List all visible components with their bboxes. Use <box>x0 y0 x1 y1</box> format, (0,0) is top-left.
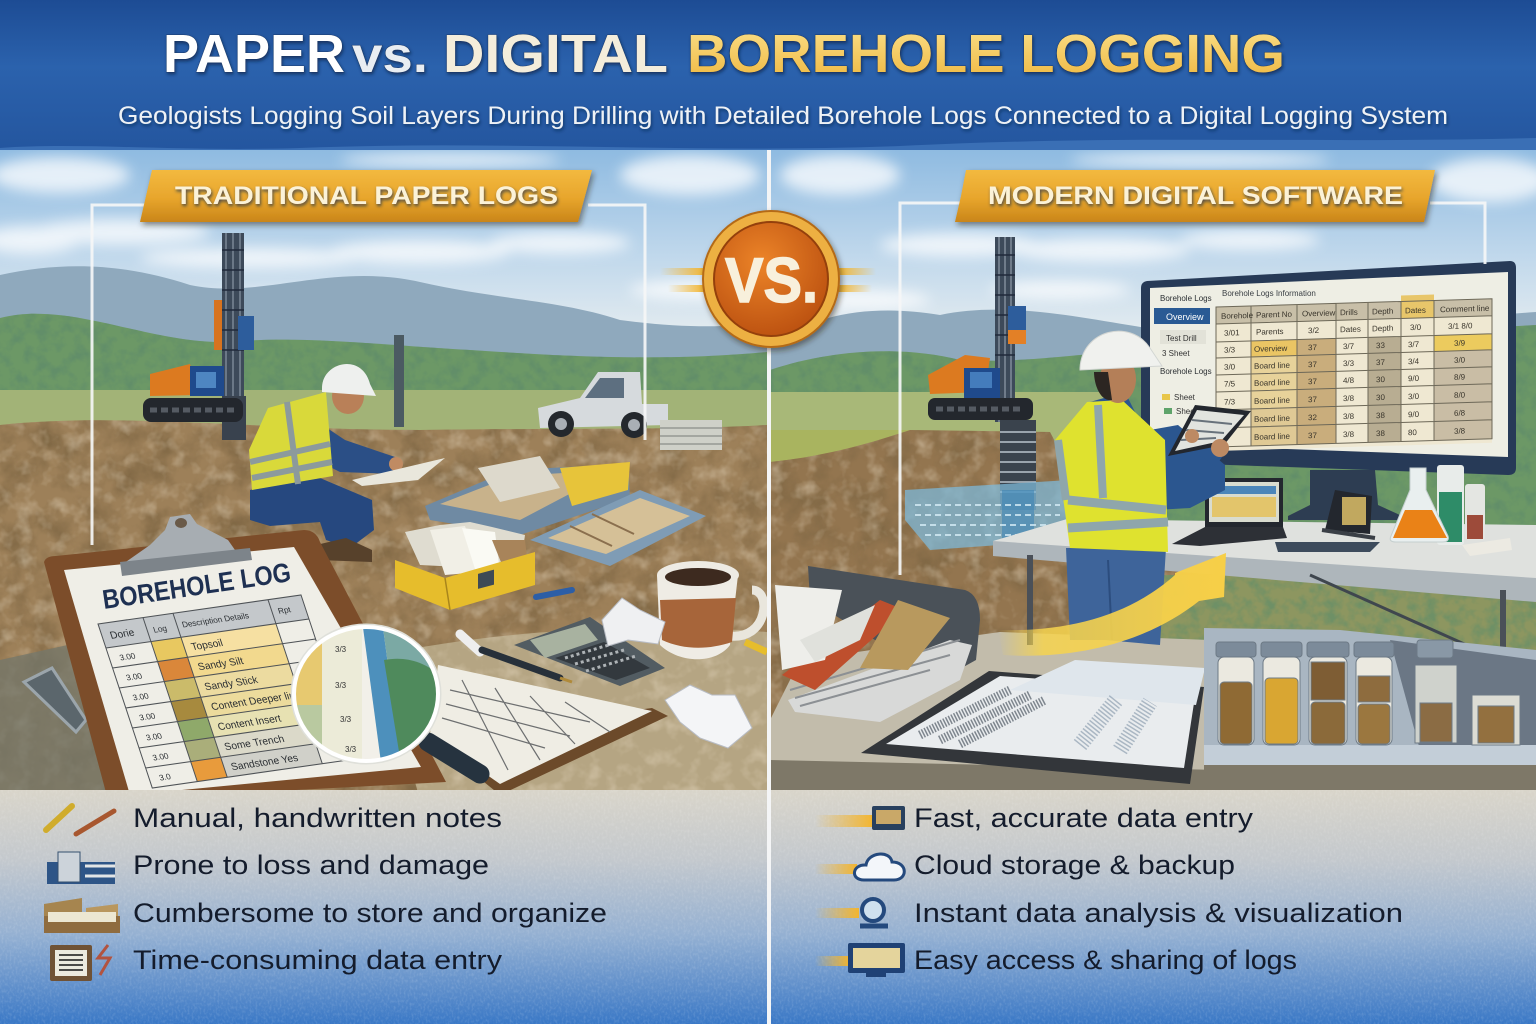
software sidebar: Test Drill <box>1166 334 1197 343</box>
software data table: Parents <box>1256 327 1284 337</box>
icon: cloud <box>815 854 904 880</box>
software sidebar: Sheet <box>1174 393 1196 402</box>
software data table: 32 <box>1308 413 1317 422</box>
text: easy sharing: Easy access & sharing of logs <box>914 945 1297 975</box>
metal clip <box>120 514 252 576</box>
software data table: 3/9 <box>1454 339 1466 348</box>
magnifying glass: 3/3 <box>335 681 347 690</box>
software data table: 3/8 <box>1343 412 1355 421</box>
list: traditional drawbacks <box>44 803 607 981</box>
software data table: 3/0 <box>1454 356 1466 365</box>
software data table: 6/8 <box>1454 409 1466 418</box>
subtitle: Geologists Logging Soil Layers During Drilling with Detailed Borehole Logs Connected to a Digital Logging System <box>118 102 1448 130</box>
software data table: Dates <box>1405 306 1426 315</box>
eraser on desk <box>1462 538 1512 556</box>
distant hills <box>0 266 767 358</box>
monitor with log software <box>1141 261 1516 520</box>
software data table: 37 <box>1308 395 1317 404</box>
log table: 3.00 <box>151 752 170 763</box>
tan work surface <box>416 630 767 790</box>
software sidebar: Sheet <box>1176 407 1198 416</box>
log table: Content Deeper line <box>210 690 302 713</box>
sky with clouds <box>0 150 767 326</box>
drilling rig <box>143 233 254 440</box>
center divider <box>767 150 771 1024</box>
software data table: 80 <box>1408 428 1417 437</box>
log table: 3.00 <box>145 732 164 743</box>
stacked core trays in distance <box>660 420 722 450</box>
magnifying glass: 3/3 <box>345 745 357 754</box>
log table: Dorie <box>109 628 136 642</box>
ribbon: modern digital software <box>955 170 1435 222</box>
text: time-consuming: Time-consuming data entry <box>133 945 503 975</box>
log table: 3.00 <box>138 712 157 723</box>
software data table: 7/3 <box>1224 397 1236 407</box>
stack of paper files <box>775 566 980 722</box>
text: manual notes: Manual, handwritten notes <box>133 803 502 833</box>
software data table: 9/0 <box>1408 410 1420 419</box>
software sidebar: Borehole Logs <box>1160 367 1212 376</box>
panel: modern digital software scene <box>770 140 1536 800</box>
notebook with handwritten table <box>430 665 668 795</box>
software data table: 3/7 <box>1343 342 1355 351</box>
log table: Some Trench <box>223 734 286 753</box>
software data table: Board line <box>1254 396 1291 406</box>
log table <box>98 595 355 788</box>
software data table: Overview <box>1254 344 1288 354</box>
log table: 3.00 <box>125 672 144 683</box>
software data table: 3/3 <box>1343 359 1355 368</box>
drilling rig <box>928 237 1033 422</box>
log table: 3.00 <box>132 692 150 703</box>
software heading: Borehole Logs Information <box>1222 289 1316 298</box>
vs badge <box>660 211 876 347</box>
icon: laptop with speed streak <box>815 806 905 830</box>
green wooded hills <box>771 325 1536 525</box>
worker crouching and writing <box>249 364 445 562</box>
magnifying glass <box>290 620 480 774</box>
software data table: 37 <box>1308 431 1317 440</box>
white desk <box>993 519 1536 675</box>
paper to digital arrow <box>998 553 1226 656</box>
software data table: Overview <box>1302 308 1336 318</box>
pens on ground <box>536 590 572 597</box>
grass field <box>771 392 1104 462</box>
panel: bottom comparison list background <box>0 790 1536 1024</box>
excavated soil <box>0 420 767 800</box>
icon: analysis magnifier <box>815 899 888 926</box>
software data table: 8/0 <box>1454 391 1466 400</box>
soil cross-section <box>771 430 1178 718</box>
distant post <box>394 335 404 427</box>
software sidebar: 3 Sheet <box>1162 349 1190 358</box>
icon: clipboard with zigzag <box>50 945 110 981</box>
clipboard with borehole log <box>44 514 446 800</box>
log table: 3.00 <box>118 652 137 663</box>
software data table: 3/3 <box>1224 345 1236 355</box>
icon: storage box <box>44 898 120 933</box>
phone on stand <box>1322 490 1375 538</box>
software data table: 37 <box>1308 343 1317 352</box>
software data table: Depth <box>1372 324 1393 333</box>
software data table: 3/4 <box>1408 357 1420 366</box>
log table: Sandstone Yes <box>230 753 300 773</box>
software data table: 30 <box>1376 393 1385 402</box>
software data table: Board line <box>1254 378 1291 388</box>
software data table: Comment line <box>1440 304 1490 314</box>
coffee mug <box>657 561 764 659</box>
ribbon: modern digital software: MODERN DIGITAL SOFTWARE <box>988 182 1403 210</box>
software data table: Depth <box>1372 307 1393 316</box>
software data table: Parent No <box>1256 310 1293 320</box>
grey foreground table surface <box>770 632 1220 800</box>
title <box>163 24 1285 84</box>
software data table: Drills <box>1340 308 1358 317</box>
software data table: Board line <box>1254 361 1291 371</box>
title: PAPER <box>163 24 345 84</box>
grass field <box>0 390 767 434</box>
log table: Log <box>152 624 169 635</box>
crumpled paper near mug <box>602 598 665 646</box>
text: cloud storage: Cloud storage & backup <box>914 850 1235 880</box>
ribbon: traditional paper logs: TRADITIONAL PAPER LOGS <box>175 182 558 210</box>
laptop <box>1172 478 1287 546</box>
clipboard board <box>44 530 446 800</box>
software data table: 38 <box>1376 429 1385 438</box>
title: vs. <box>352 27 428 83</box>
software data table: 3/0 <box>1224 362 1236 372</box>
log table: Content Insert <box>216 714 283 733</box>
open core sample trays <box>425 456 706 566</box>
green wooded hills <box>0 314 767 395</box>
software data table: 3/8 <box>1454 427 1466 436</box>
yellow box with papers <box>395 522 535 610</box>
text: loss and damage: Prone to loss and damage <box>133 850 489 880</box>
software data table: 37 <box>1308 377 1317 386</box>
technician with tablet <box>1055 331 1251 645</box>
metal device at left <box>24 668 86 732</box>
sky with clouds <box>771 150 1536 328</box>
text: instant analysis: Instant data analysis & visualization <box>914 898 1403 928</box>
software data table: 30 <box>1376 375 1385 384</box>
software data table: 3/8 <box>1343 430 1355 439</box>
laboratory flasks <box>1390 465 1485 545</box>
ribbon: traditional paper logs <box>140 170 592 222</box>
log table: 3.0 <box>158 772 172 783</box>
panel: traditional paper logs scene <box>0 140 770 800</box>
software data table: 3/1 8/0 <box>1448 321 1473 331</box>
panel frames <box>92 203 1485 575</box>
pen on table <box>460 634 572 682</box>
vs badge: VS. <box>725 246 818 316</box>
title: BOREHOLE LOGGING <box>687 24 1285 84</box>
list: digital benefits <box>815 803 1403 977</box>
software data table: 4/8 <box>1343 376 1355 385</box>
software data table: 3/7 <box>1408 340 1420 349</box>
software data table: 37 <box>1376 358 1385 367</box>
software data table: 7/5 <box>1224 379 1236 389</box>
software data table: Board line <box>1254 432 1291 442</box>
digital groundwater layer <box>905 480 1070 550</box>
software sidebar: Overview <box>1166 312 1204 322</box>
crumpled paper right <box>665 685 752 748</box>
magnifying glass: 3/3 <box>335 645 347 654</box>
software data table: 3/0 <box>1408 392 1420 401</box>
title: DIGITAL <box>443 24 668 84</box>
icon: pencils <box>46 806 114 834</box>
software data table: 9/0 <box>1408 374 1420 383</box>
icon: damaged books <box>47 852 115 884</box>
sheet title: BOREHOLE LOG <box>100 557 293 615</box>
text: fast entry: Fast, accurate data entry <box>914 803 1254 833</box>
software data table: 3/0 <box>1410 323 1422 332</box>
software data table: 33 <box>1376 341 1385 350</box>
log sheet paper <box>64 547 421 795</box>
software data table: Borehole <box>1221 311 1254 321</box>
log table: Topsoil <box>190 638 225 653</box>
calculator <box>514 617 665 686</box>
borehole casing <box>1000 420 1036 510</box>
software data table: Board line <box>1254 414 1291 424</box>
software data table: 3/01 <box>1224 328 1240 338</box>
software data table: 3/8 <box>1343 394 1355 403</box>
log table: Description Details <box>181 611 250 629</box>
log table: Sandy Stick <box>203 675 260 693</box>
sample jar tray <box>1204 628 1536 790</box>
grey foreground ground <box>0 645 300 790</box>
pickup truck <box>538 372 668 438</box>
log table: Rpt <box>277 605 293 616</box>
pencil behind mug <box>745 642 767 652</box>
log table: Sandy Silt <box>197 656 245 673</box>
software data table: 37 <box>1308 360 1317 369</box>
field behind desk <box>1160 575 1536 650</box>
magnifying glass: 3/3 <box>340 715 352 724</box>
software data table <box>1216 293 1492 451</box>
software data table: 3/2 <box>1308 326 1320 335</box>
open report on table <box>861 660 1205 784</box>
header banner <box>0 0 1536 149</box>
software sidebar: Borehole Logs <box>1160 294 1212 303</box>
text: cumbersome: Cumbersome to store and organize <box>133 898 607 928</box>
software data table: 8/9 <box>1454 373 1466 382</box>
software data table: 38 <box>1376 411 1385 420</box>
icon: monitor <box>815 943 905 977</box>
keyboard on desk <box>1275 542 1380 552</box>
distant hills <box>771 310 1536 370</box>
software data table: Dates <box>1340 325 1361 334</box>
software sidebar <box>1154 294 1212 416</box>
